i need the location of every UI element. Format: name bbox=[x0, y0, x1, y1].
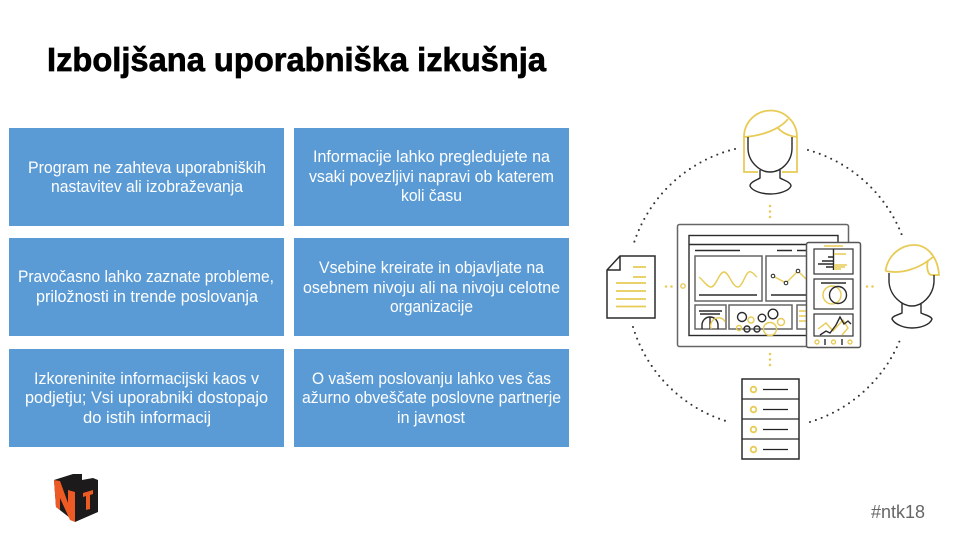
panel: inform partners bbox=[294, 349, 569, 447]
panel: information chaos: Izkoreninite informacijski kaos v bbox=[34, 370, 260, 388]
icon: yellow connector dots bbox=[666, 206, 875, 369]
panel: any device any time: koli času bbox=[401, 187, 462, 205]
panel: information chaos bbox=[9, 349, 284, 447]
icon: dotted connection circle bbox=[633, 149, 903, 422]
trend chart panel bbox=[766, 256, 807, 301]
line chart panel bbox=[695, 256, 762, 301]
panel: any device any time: Informacije lahko pregledujete na bbox=[313, 148, 551, 166]
venn panel bbox=[695, 305, 726, 329]
hashtag: #ntk18 bbox=[871, 502, 925, 522]
panel: no settings or training: nastavitev ali izobraževanja bbox=[51, 178, 244, 196]
icon: server stack bbox=[742, 379, 799, 459]
icon: document bbox=[607, 256, 655, 318]
icon: man user bbox=[886, 245, 939, 328]
panel: any device any time bbox=[294, 128, 569, 226]
panel: any device any time: vsaki povezljivi napravi ob katerem bbox=[309, 168, 554, 186]
panel: publish content bbox=[294, 238, 569, 336]
panel: spot problems: Pravočasno lahko zaznate probleme, bbox=[18, 268, 274, 286]
icon: woman user bbox=[744, 110, 797, 194]
panel: spot problems bbox=[9, 238, 284, 336]
icon: tablet bbox=[806, 242, 860, 348]
icon: monitor dashboard bbox=[678, 224, 848, 346]
bubble panel bbox=[729, 305, 792, 336]
panel: inform partners: ažurno obveščate poslovne partnerje bbox=[302, 389, 561, 407]
panel: publish content: Vsebine kreirate in objavljate na bbox=[319, 259, 545, 277]
list panel bbox=[797, 305, 809, 329]
panel: publish content: organizacije bbox=[390, 298, 473, 316]
panel: no settings or training: Program ne zahteva uporabniških bbox=[28, 159, 266, 177]
panel: publish content: osebnem nivoju ali na nivoju celotne bbox=[303, 279, 560, 297]
panel: no settings or training bbox=[9, 128, 284, 226]
title: Izboljšana uporabniška izkušnja bbox=[47, 42, 546, 79]
panel: inform partners: in javnost bbox=[397, 409, 465, 427]
panel: information chaos: podjetju; Vsi uporabniki dostopajo bbox=[25, 389, 268, 407]
panel: inform partners: O vašem poslovanju lahko ves čas bbox=[312, 370, 551, 388]
logo: NT cube bbox=[54, 474, 98, 522]
panel: spot problems: priložnosti in trende poslovanja bbox=[36, 288, 259, 306]
panel: information chaos: do istih informacij bbox=[83, 409, 211, 427]
